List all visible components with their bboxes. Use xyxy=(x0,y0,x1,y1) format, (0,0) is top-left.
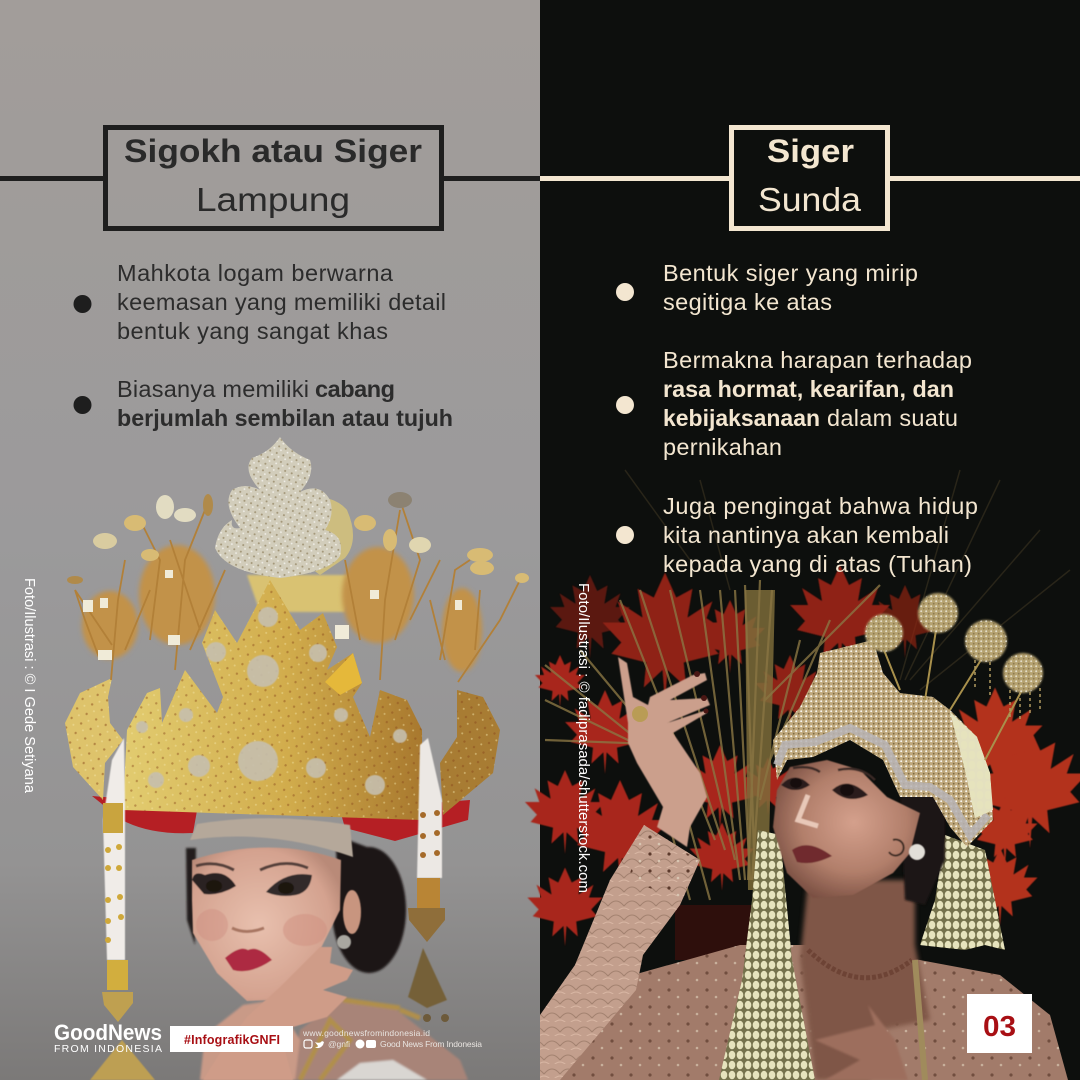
footer: hashtag badge xyxy=(170,1026,293,1052)
bullet 2 text xyxy=(74,376,453,431)
page number badge: 03 xyxy=(983,1011,1016,1043)
footer: hashtag badge: #InfografikGNFI xyxy=(184,1033,280,1047)
footer: website and social links: @gnfi xyxy=(328,1039,350,1049)
neck and shoulder dress xyxy=(200,997,468,1080)
red leaves xyxy=(525,565,1080,1080)
bullet 2 text: cabang xyxy=(315,376,395,402)
bullet 2 text: berjumlah sembilan atau tujuh xyxy=(117,405,453,431)
hair bun xyxy=(186,835,406,973)
chest and necklace xyxy=(800,880,930,1080)
panel: left background (Lampung) xyxy=(0,0,540,1080)
gold back plate xyxy=(247,575,353,612)
bullet 1 text: bentuk yang sangat khas xyxy=(117,318,388,344)
left white ribbon with pendant xyxy=(90,738,155,1080)
divider line right xyxy=(540,176,1080,181)
bullet 3 text xyxy=(616,493,978,577)
footer: GoodNews logo xyxy=(54,1020,162,1055)
hair xyxy=(900,790,945,905)
footer: GoodNews logo: FROM INDONESIA xyxy=(54,1043,162,1055)
lace arm xyxy=(540,825,700,1080)
right bullet list xyxy=(616,260,978,577)
bullet 2 text: Biasanya memiliki xyxy=(117,376,309,402)
bullet 2 text: dalam suatu xyxy=(827,405,958,431)
bullet 2 text: kebijaksanaan xyxy=(663,405,820,431)
left bullet list xyxy=(74,260,453,431)
faint grass at top xyxy=(625,470,1070,690)
gold flower sprays xyxy=(67,492,529,682)
crown main body xyxy=(123,580,423,820)
divider line left xyxy=(0,176,540,181)
jasmine strands xyxy=(719,830,1005,1080)
bullet 1 text: keemasan yang memiliki detail xyxy=(117,289,446,315)
raised hand xyxy=(618,657,710,847)
heading box: Siger Sunda: Siger xyxy=(767,133,854,169)
photo: Sundanese bride with siger crown xyxy=(525,470,1080,1080)
bullet 3 text: kepada yang di atas (Tuhan) xyxy=(663,551,972,577)
bullet 3 text: Juga pengingat bahwa hidup xyxy=(663,493,978,519)
photo: Lampung bride with siger crown xyxy=(65,437,529,1080)
bullet 1 text: segitiga ke atas xyxy=(663,289,832,315)
bullet 1 text xyxy=(616,260,918,315)
bullet 2 text xyxy=(616,347,972,460)
page number badge xyxy=(967,994,1032,1053)
right white ribbon with pendants xyxy=(408,738,449,1022)
panel: right background (Sunda) xyxy=(540,0,1080,1080)
pot xyxy=(675,905,755,960)
crown wings xyxy=(65,678,500,815)
lower hand xyxy=(815,1005,908,1080)
heading box: Siger Sunda xyxy=(732,128,888,228)
footer: website and social links: www.goodnewsfromindonesia.id xyxy=(302,1028,430,1038)
bullet 2 text: rasa hormat, kearifan, dan xyxy=(663,376,954,402)
beaded headband xyxy=(190,818,353,857)
bullet 1 text: Mahkota logam berwarna xyxy=(117,260,394,286)
heading box: Sigokh atau Siger Lampung: Lampung xyxy=(196,181,350,218)
bullet 2 text: pernikahan xyxy=(663,434,782,460)
hand xyxy=(203,947,353,1080)
footer: website and social links: Good News From Indonesia xyxy=(380,1039,482,1049)
bullet 2 text: Bermakna harapan terhadap xyxy=(663,347,972,373)
footer: GoodNews logo: GoodNews xyxy=(54,1020,162,1045)
face xyxy=(773,760,925,898)
photo credit left: Foto/Ilustrasi : © I Gede Setiyana xyxy=(21,578,37,794)
footer: website and social links xyxy=(302,1028,482,1049)
bullet 3 text: kita nantinya akan kembali xyxy=(663,522,949,548)
heading box: Sigokh atau Siger Lampung xyxy=(106,128,442,228)
photo credit right: Foto/Ilustrasi : © fadiprasada/shutterstock.com xyxy=(575,583,591,893)
red lining xyxy=(92,796,470,841)
dress xyxy=(540,945,1068,1080)
bullet 1 text: Bentuk siger yang mirip xyxy=(663,260,918,286)
silver top ornament xyxy=(215,437,353,578)
crown pom flowers xyxy=(865,593,1043,760)
grass fan xyxy=(545,580,880,900)
bullet 1 text xyxy=(74,260,446,344)
heading box: Siger Sunda: Sunda xyxy=(758,181,862,218)
heading box: Sigokh atau Siger Lampung: Sigokh atau Siger xyxy=(124,133,422,169)
crown xyxy=(773,640,993,847)
face xyxy=(192,848,341,1001)
ear and earring xyxy=(337,890,361,949)
